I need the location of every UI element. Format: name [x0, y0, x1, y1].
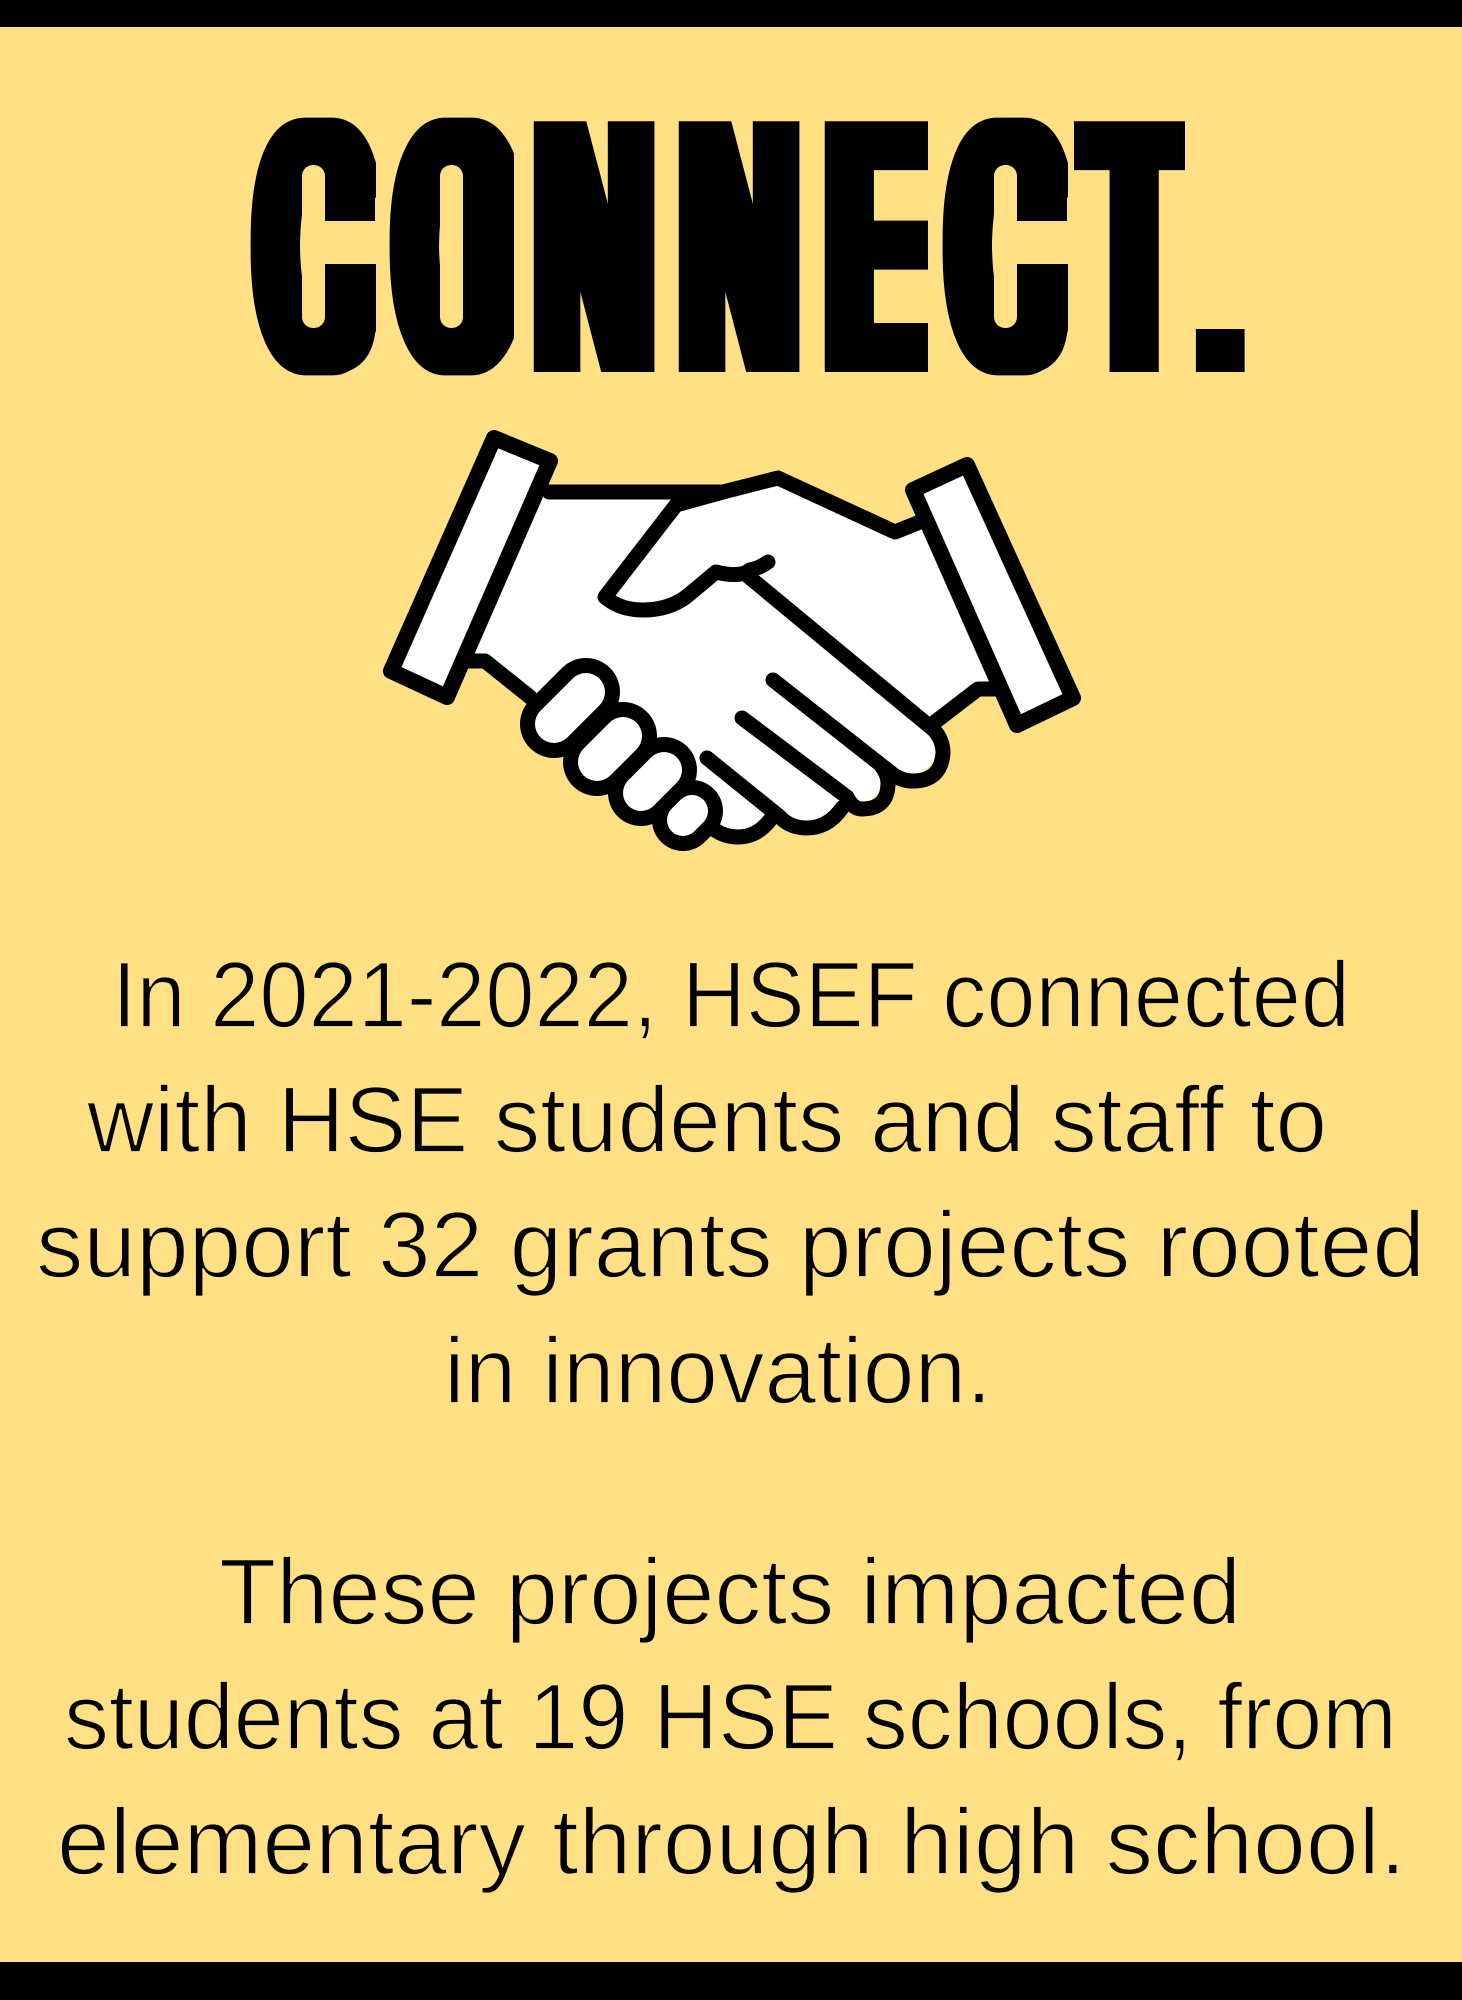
line 2: with HSE students and staff to — [86, 1067, 1327, 1172]
top black bar — [0, 0, 1462, 27]
bottom black bar — [0, 1962, 1462, 2000]
hand outlines — [466, 478, 995, 837]
left cuff — [391, 438, 550, 697]
line 5: These projects impacted — [219, 1539, 1241, 1644]
line 6: students at 19 HSE schools, from — [64, 1664, 1397, 1769]
right cuff — [913, 465, 1073, 725]
paragraph: grants — [36, 942, 1425, 1423]
line 3: support 32 grants projects rooted — [36, 1192, 1425, 1297]
title: CONNECT. — [257, 50, 1243, 442]
left hand fingers — [554, 692, 692, 820]
line 1: In 2021-2022, HSEF connected — [112, 942, 1350, 1047]
line 4: in innovation. — [444, 1318, 992, 1423]
hand silhouette fill — [460, 478, 1005, 837]
icon: handshake — [391, 438, 1073, 837]
paragraph: schools — [57, 1539, 1406, 1894]
line 7: elementary through high school. — [57, 1789, 1406, 1894]
